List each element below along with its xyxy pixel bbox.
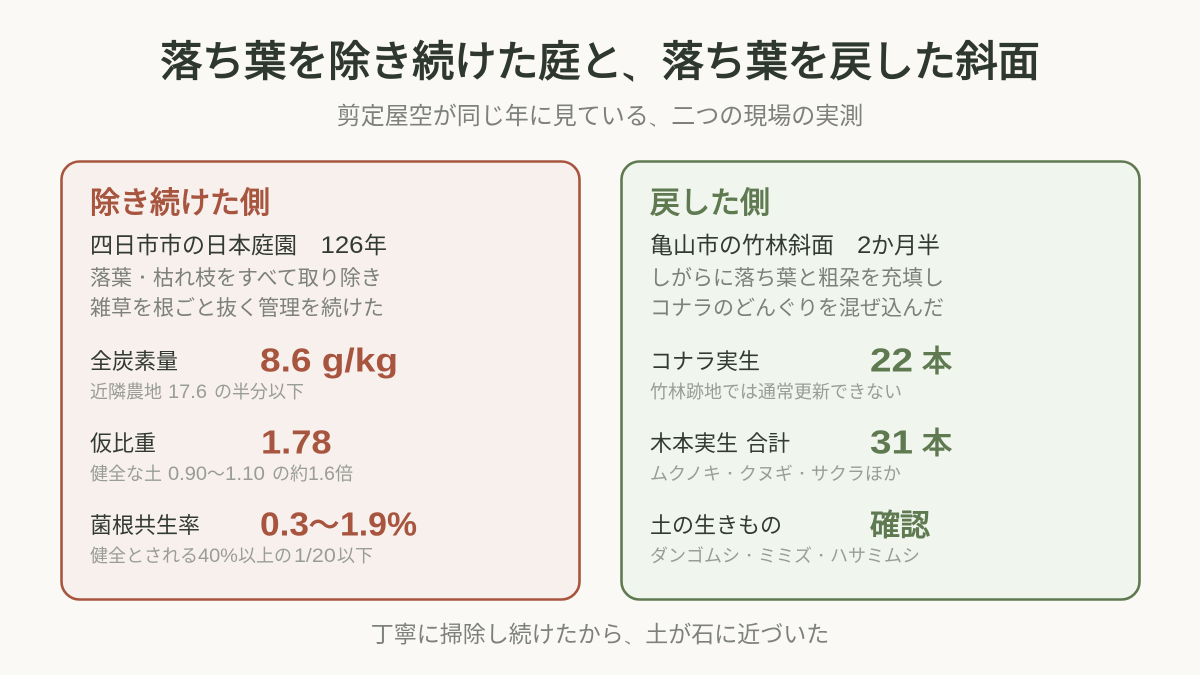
metric: total seedlings: 本 (922, 428, 953, 458)
panel: removed side (62, 162, 580, 600)
metric: mycorrhizal rate: 1/20 (294, 546, 336, 567)
metric: total carbon: 8.6 g/kg (260, 342, 398, 379)
metric: total carbon: 近隣農地 (90, 382, 162, 401)
metric: mycorrhizal rate: 健全とされる (90, 546, 198, 565)
metric: bulk density: 1.78 (261, 425, 332, 461)
metric: bulk density: の約 (272, 464, 308, 483)
metric: bulk density: 倍 (335, 464, 353, 483)
metric: total seedlings: 合計 (746, 432, 790, 455)
panel: returned side (622, 162, 1140, 600)
metric: bulk density: 0.90 (168, 463, 207, 485)
metric: konara seedlings: 竹林跡地では通常更新できない (650, 382, 902, 401)
site description: 亀山市の竹林斜面 (650, 233, 834, 257)
metric: total carbon (90, 342, 398, 403)
site description: 2 (857, 232, 871, 259)
metric: mycorrhizal rate (90, 507, 417, 567)
metric: total seedlings: 木本実生 (650, 432, 738, 455)
metric: soil creatures: ダンゴムシ・ミミズ・ハサミムシ (650, 546, 920, 565)
panel heading: 除き続けた側 (90, 187, 270, 218)
site description: 年 (364, 233, 387, 257)
metric: bulk density: 〜 (207, 465, 225, 483)
metric: soil creatures: 確認 (870, 510, 930, 540)
panel background (622, 162, 1140, 600)
metric: bulk density: 健全な土 (90, 464, 162, 483)
metric: soil creatures (650, 510, 930, 565)
metric: bulk density: 1.6 (308, 464, 335, 485)
metric: total seedlings: 31 (870, 423, 913, 461)
metric: bulk density (90, 425, 353, 485)
metric: total seedlings: ムクノキ・クヌギ・サクラほか (650, 464, 901, 483)
site description: コナラのどんぐりを混ぜ込んだ (650, 297, 944, 319)
title: 落ち葉を除き続けた庭と、落ち葉を戻した斜面 (160, 39, 1040, 83)
metric: bulk density: 1.10 (225, 464, 265, 485)
panel heading: 戻した側 (649, 187, 770, 218)
metric: konara seedlings (650, 341, 953, 401)
site description (90, 232, 387, 319)
metric: total carbon: 全炭素量 (90, 350, 178, 373)
site description: 落葉・枯れ枝をすべて取り除き (90, 267, 382, 289)
metric: soil creatures: 土の生きもの (650, 514, 782, 537)
metric: total seedlings (650, 423, 953, 483)
site description: 雑草を根ごと抜く管理を続けた (90, 297, 384, 319)
metric: konara seedlings: 22 (870, 341, 913, 379)
metric: mycorrhizal rate: 0.3 (260, 507, 309, 543)
metric: mycorrhizal rate: 以下 (337, 547, 373, 565)
metric: total carbon: 17.6 (168, 381, 207, 403)
metric: mycorrhizal rate: 40% (198, 545, 238, 567)
panel background (62, 162, 580, 600)
metric: mycorrhizal rate: 菌根共生率 (90, 514, 200, 537)
metric: konara seedlings: 本 (922, 346, 953, 376)
metric: mycorrhizal rate: 以上の (238, 546, 292, 565)
metric: mycorrhizal rate: 1.9% (340, 507, 417, 543)
metric: bulk density: 仮比重 (90, 432, 156, 455)
site description: か月半 (871, 233, 940, 257)
site description (650, 232, 944, 319)
metric: total carbon: の半分以下 (214, 382, 304, 401)
site description: しがらに落ち葉と粗朶を充填し (650, 267, 944, 289)
closing statement: 丁寧に掃除し続けたから、土が石に近づいた (371, 622, 829, 646)
metric: mycorrhizal rate: 〜 (309, 512, 339, 540)
subtitle: 剪定屋空が同じ年に見ている、二つの現場の実測 (337, 103, 863, 128)
site description: 四日市市の日本庭園 (90, 233, 297, 257)
site description: 126 (320, 232, 363, 259)
metric: konara seedlings: コナラ実生 (650, 350, 760, 373)
